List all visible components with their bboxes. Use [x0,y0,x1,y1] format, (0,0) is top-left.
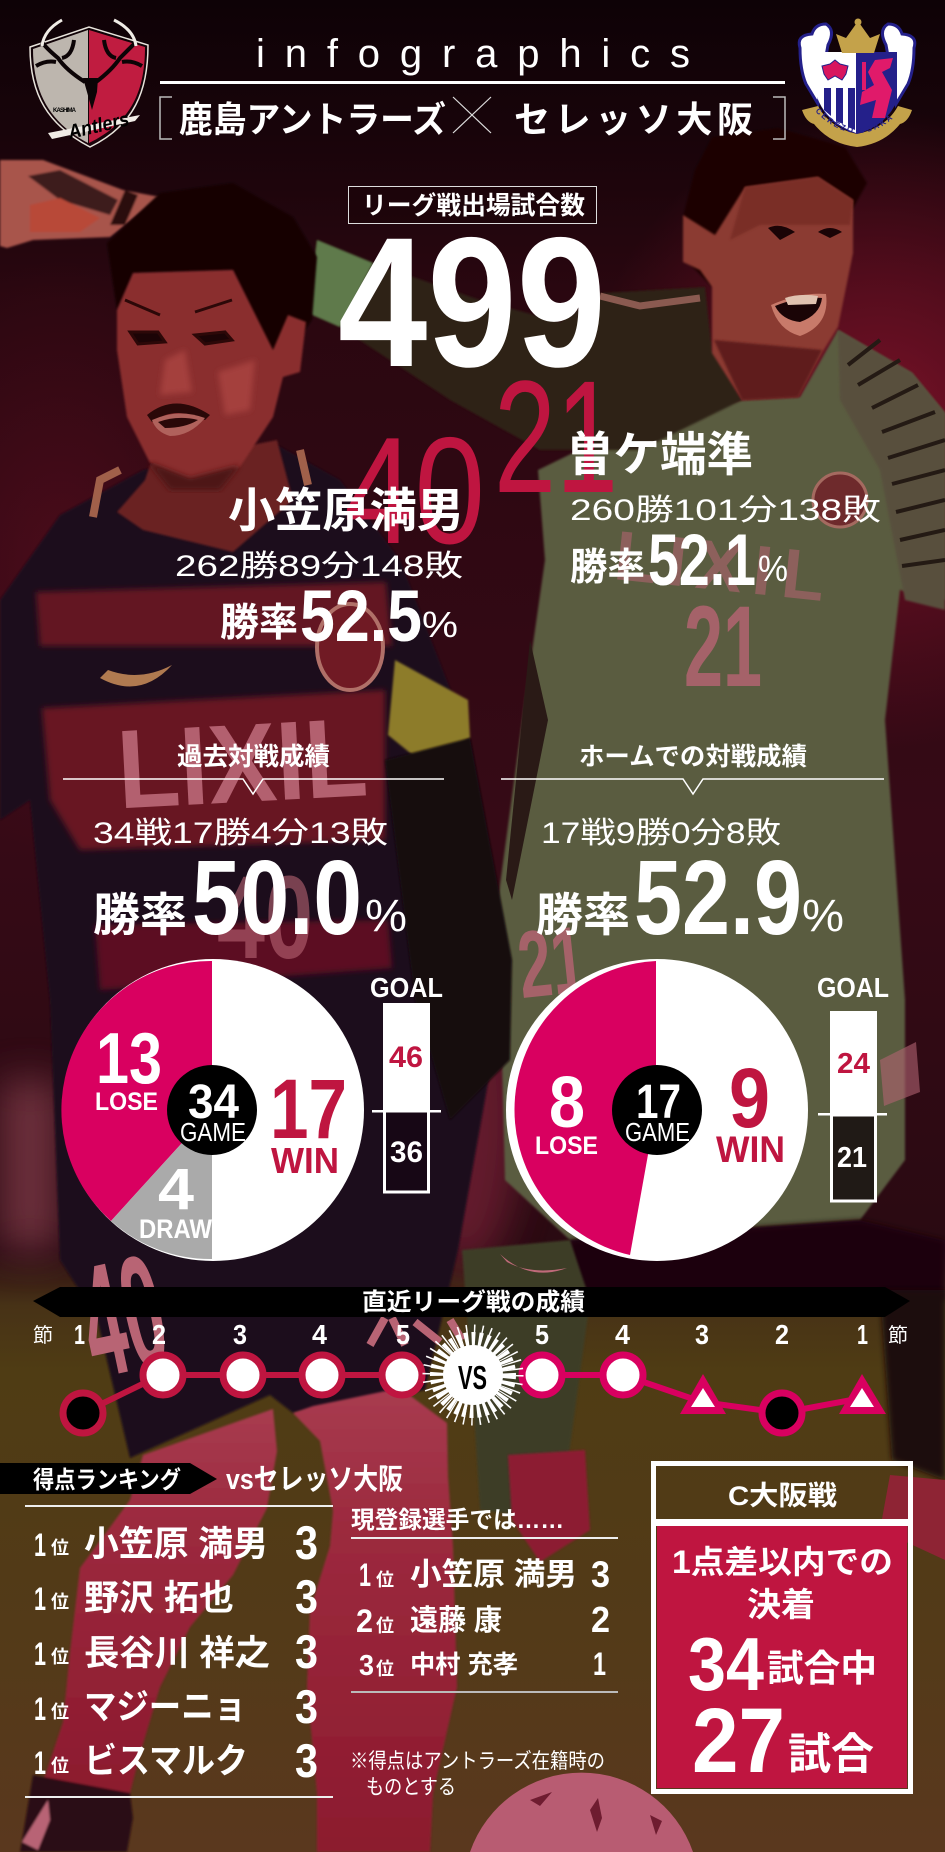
goal bar: all-time [370,972,443,1192]
past head-to-head record: % [365,890,407,941]
player stats: Ogasawara: 262勝89分148敗 [175,550,463,583]
goal bar: home: GOAL [817,972,889,1003]
scoring ranking heading: 得点ランキング [33,1466,181,1494]
panel: C Osaka one-goal games: 34 [688,1622,764,1706]
logo: Cerezo Osaka [798,18,916,147]
pie chart: home record: WIN [716,1129,785,1170]
goal bar: home: 24 [837,1048,870,1080]
current squad ranking [351,1507,618,1693]
matchday numbers: 2 [152,1319,166,1350]
pie chart: all-time record: 17 [270,1062,347,1156]
player stats: Ogasawara: 小笠原満男 [228,484,464,537]
jersey markings: LIXIL [611,516,829,616]
matchday numbers: 5 [535,1319,549,1350]
row: Mazinho [34,1680,318,1733]
recent league results ribbon: 直近リーグ戦の成績 [362,1288,585,1316]
player stats: Sogahata: 260勝101分138敗 [570,494,881,527]
player stats: Sogahata: 曽ケ端準 [567,428,753,481]
matchday numbers: 1 [857,1319,868,1350]
row: Endo: 2 [356,1603,373,1639]
row: Nakamura: 位 [376,1659,394,1679]
row: Ogasawara: 1 [34,1527,46,1563]
VS starburst [433,1335,513,1415]
shirt number 21: 21 [494,347,618,526]
matchday numbers [33,1319,908,1350]
pie chart: home record: 8 [549,1063,585,1143]
row: Ogasawara: 3 [295,1516,318,1569]
row: Endo: 遠藤 康 [410,1604,502,1637]
heading: match-up with brackets: セレッソ大阪 [514,99,753,140]
row: Nozawa [34,1570,318,1623]
goal bar: all-time: GOAL [370,972,443,1003]
row: Nakamura [359,1646,606,1682]
jersey markings: 21 [513,907,590,1019]
pie chart: all-time record: LOSE [95,1088,158,1116]
heading: match-up with brackets [160,97,785,140]
home head-to-head record: 勝率 [536,889,630,941]
pie chart: home record: GAME [625,1117,690,1147]
pie chart: home record: 9 [729,1051,770,1145]
scoring ranking heading [0,1463,403,1496]
row: Nakamura: 1 [593,1646,606,1682]
goal bar: home: 21 [837,1142,867,1174]
pie chart: home record: 17 [636,1076,681,1129]
goal bar: all-time: 46 [389,1041,423,1074]
jersey markings: 21 [684,583,762,711]
home head-to-head record: 17戦9勝0分8敗 [541,817,781,850]
scoring ranking list [25,1505,333,1798]
pie chart: all-time record [61,959,364,1261]
recent league results ribbon [33,1287,910,1317]
title: infographics: infographics [256,32,690,76]
jersey markings [65,516,829,1412]
row: Nakamura: 中村 充孝 [410,1651,518,1679]
jersey markings: 40 [217,852,313,984]
panel: C Osaka one-goal games [654,1464,910,1792]
panel: C Osaka one-goal games: 27 [692,1690,785,1792]
pie chart: home record: LOSE [535,1132,598,1160]
row: Bismarck: 3 [295,1734,318,1787]
logo: Kashima Antlers [30,20,148,147]
past head-to-head record [63,743,444,957]
pie chart: all-time record: WIN [271,1140,339,1181]
jersey markings: 40 [65,1220,181,1412]
label: league appearances [348,186,596,224]
row: Mazinho: 位 [51,1702,69,1722]
matchday numbers: 4 [312,1319,327,1350]
player stats: Ogasawara [175,484,464,657]
scoring ranking heading: vsセレッソ大阪 [226,1463,403,1496]
home head-to-head record: % [802,890,844,941]
logo: Kashima Antlers: KASHIMA [53,108,77,114]
panel: C Osaka one-goal games: 試合中 [767,1648,877,1689]
logo: Cerezo Osaka: CEREZO OSAKA [816,108,893,133]
big number 499: 499 [338,200,606,406]
row: Bismarck [34,1734,318,1787]
VS starburst: VS [458,1359,487,1396]
home head-to-head record: ホームでの対戦成績 [579,743,807,771]
label: league appearances: リーグ戦出場試合数 [362,191,585,220]
pie chart: all-time record: 4 [158,1157,194,1222]
row: Ogasawara: 小笠原 満男 [410,1557,577,1592]
shirt number 40: 40 [344,406,485,576]
pie chart: all-time record: 13 [96,1019,162,1099]
goal bar: home [817,972,889,1201]
right player: arm, torso and shorts [308,240,945,1562]
matchday numbers: 5 [396,1319,410,1350]
row: Hasegawa: 位 [51,1647,69,1667]
pie chart: all-time record: DRAW [139,1214,212,1244]
jersey markings: LIXIL [114,694,370,832]
left player legs [20,1388,457,1852]
row: Nozawa: 1 [34,1581,46,1617]
results timeline: Cerezo [522,1355,886,1433]
matchday numbers: 1 [74,1319,85,1350]
pie chart: home record [506,959,808,1261]
panel: C Osaka one-goal games: 1点差以内での [672,1544,893,1580]
past head-to-head record: 勝率 [93,889,187,941]
player stats: Sogahata [567,428,881,601]
results timeline: Antlers [63,1355,422,1433]
past head-to-head record: 50.0 [192,839,362,957]
row: Mazinho: 3 [295,1680,318,1733]
player stats: Ogasawara: 52.5 [300,576,422,657]
row: Endo [356,1599,610,1640]
row: Ogasawara: 3 [591,1554,610,1595]
goalkeeper glove [0,160,160,248]
player stats: Ogasawara: % [422,604,458,645]
matchday numbers: 4 [615,1319,630,1350]
row: Bismarck: ビスマルク [84,1742,248,1781]
row: Nozawa: 野沢 拓也 [84,1579,234,1618]
row: Bismarck: 1 [34,1745,46,1781]
soccer ball [470,1773,693,1852]
matchday numbers: 3 [233,1319,247,1350]
matchday numbers: 3 [695,1319,709,1350]
pie chart: all-time record: 34 [188,1076,239,1129]
row: Ogasawara: 小笠原 満男 [84,1525,268,1564]
row: Mazinho: 1 [34,1691,46,1727]
row: Ogasawara [359,1554,610,1595]
home head-to-head record: 52.9 [634,839,802,957]
header rule [160,81,785,84]
row: Ogasawara: 位 [376,1570,394,1590]
row: Nozawa: 3 [295,1570,318,1623]
row: Endo: 2 [591,1599,610,1640]
goal bar: all-time: 36 [390,1136,423,1169]
row: Nozawa: 位 [51,1592,69,1612]
logo: Kashima Antlers: Antlers [65,108,131,144]
matchday numbers: 2 [775,1319,789,1350]
player stats: Sogahata: 52.1 [648,520,756,601]
left player shirt, arm and shorts [0,440,867,1458]
left player head [107,183,317,490]
row: Ogasawara [34,1516,318,1569]
player stats: Sogahata: % [758,548,788,589]
panel: C Osaka one-goal games: 決着 [747,1586,815,1623]
player stats: Ogasawara: 勝率 [220,602,298,645]
row: Hasegawa: 長谷川 祥之 [84,1634,270,1673]
past head-to-head record: 過去対戦成績 [177,743,330,771]
row: Endo: 位 [376,1616,394,1636]
matchday numbers: 節 [888,1324,908,1347]
matchday numbers: 節 [33,1324,53,1347]
pie chart: all-time record: GAME [180,1117,246,1147]
row: Mazinho: マジーニョ [84,1688,246,1727]
panel: C Osaka one-goal games: C大阪戦 [728,1481,837,1511]
row: Bismarck: 位 [51,1756,69,1776]
player stats: Sogahata: 勝率 [570,547,645,589]
row: Hasegawa: 1 [34,1636,46,1672]
heading: match-up with brackets: 鹿島アントラーズ [179,99,446,140]
row: Ogasawara: 1 [359,1557,371,1593]
footnote: ものとする [366,1776,456,1799]
home head-to-head record [501,743,884,957]
panel: C Osaka one-goal games: 試合 [788,1731,874,1779]
footnote [350,1750,605,1799]
right player head [683,128,867,400]
footnote: ※得点はアントラーズ在籍時の [350,1750,605,1773]
row: Nakamura: 3 [359,1650,374,1682]
current squad ranking: 現登録選手では…… [351,1507,564,1534]
row: Hasegawa [34,1625,318,1678]
row: Hasegawa: 3 [295,1625,318,1678]
row: Ogasawara: 位 [51,1538,69,1558]
past head-to-head record: 34戦17勝4分13敗 [93,817,388,850]
